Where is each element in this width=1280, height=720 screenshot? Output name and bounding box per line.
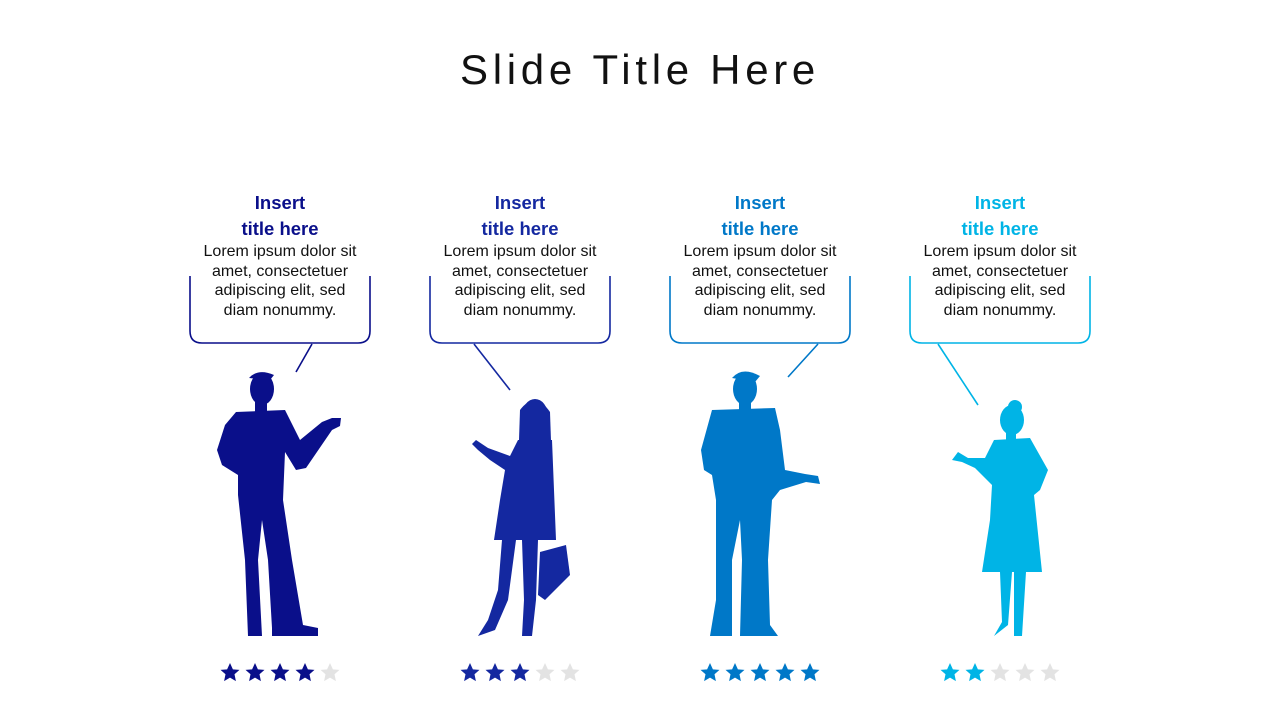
text block 3: diam nonummy. bbox=[704, 302, 816, 318]
text block 4: adipiscing elit, sed bbox=[935, 282, 1065, 299]
bubble 1 bbox=[190, 276, 370, 372]
text block 1: Insert bbox=[255, 192, 305, 213]
text block 4 bbox=[924, 192, 1076, 318]
rating 3: 5 stars bbox=[700, 663, 820, 681]
bubble 4 bbox=[910, 276, 1090, 405]
figure 3: man bbox=[701, 371, 820, 636]
text block 3: Lorem ipsum dolor sit bbox=[684, 243, 836, 260]
text block 4: Lorem ipsum dolor sit bbox=[924, 243, 1076, 260]
text block 2: Lorem ipsum dolor sit bbox=[444, 243, 596, 260]
bubble 3 bbox=[670, 276, 850, 377]
text block 4: Insert bbox=[975, 192, 1025, 213]
rating 1: 4 stars bbox=[220, 663, 340, 681]
text block 3: title here bbox=[721, 218, 799, 239]
rating 4: 2 stars bbox=[940, 663, 1060, 681]
text block 1: title here bbox=[241, 218, 319, 239]
bubble 2 bbox=[430, 276, 610, 390]
rating 2: 3 stars bbox=[460, 663, 580, 681]
text block 1: amet, consectetuer bbox=[212, 262, 348, 280]
text block 4: diam nonummy. bbox=[944, 302, 1056, 318]
text block 2 bbox=[444, 192, 596, 318]
text block 4: amet, consectetuer bbox=[932, 262, 1068, 280]
text block 2: amet, consectetuer bbox=[452, 262, 588, 280]
text block 2: diam nonummy. bbox=[464, 302, 576, 318]
text block 3 bbox=[684, 192, 836, 318]
title: Slide Title Here bbox=[460, 46, 820, 93]
text block 2: adipiscing elit, sed bbox=[455, 282, 585, 299]
figure 1: man bbox=[217, 372, 341, 636]
text block 1 bbox=[204, 192, 356, 318]
text block 2: Insert bbox=[495, 192, 545, 213]
text block 3: adipiscing elit, sed bbox=[695, 282, 825, 299]
text block 3: Insert bbox=[735, 192, 785, 213]
text block 1: Lorem ipsum dolor sit bbox=[204, 243, 356, 260]
figure 4: woman bbox=[952, 400, 1048, 636]
text block 4: title here bbox=[961, 218, 1039, 239]
figure 2: woman with briefcase bbox=[472, 399, 570, 636]
text block 1: adipiscing elit, sed bbox=[215, 282, 345, 299]
text block 3: amet, consectetuer bbox=[692, 262, 828, 280]
text block 1: diam nonummy. bbox=[224, 302, 336, 318]
text block 2: title here bbox=[481, 218, 559, 239]
